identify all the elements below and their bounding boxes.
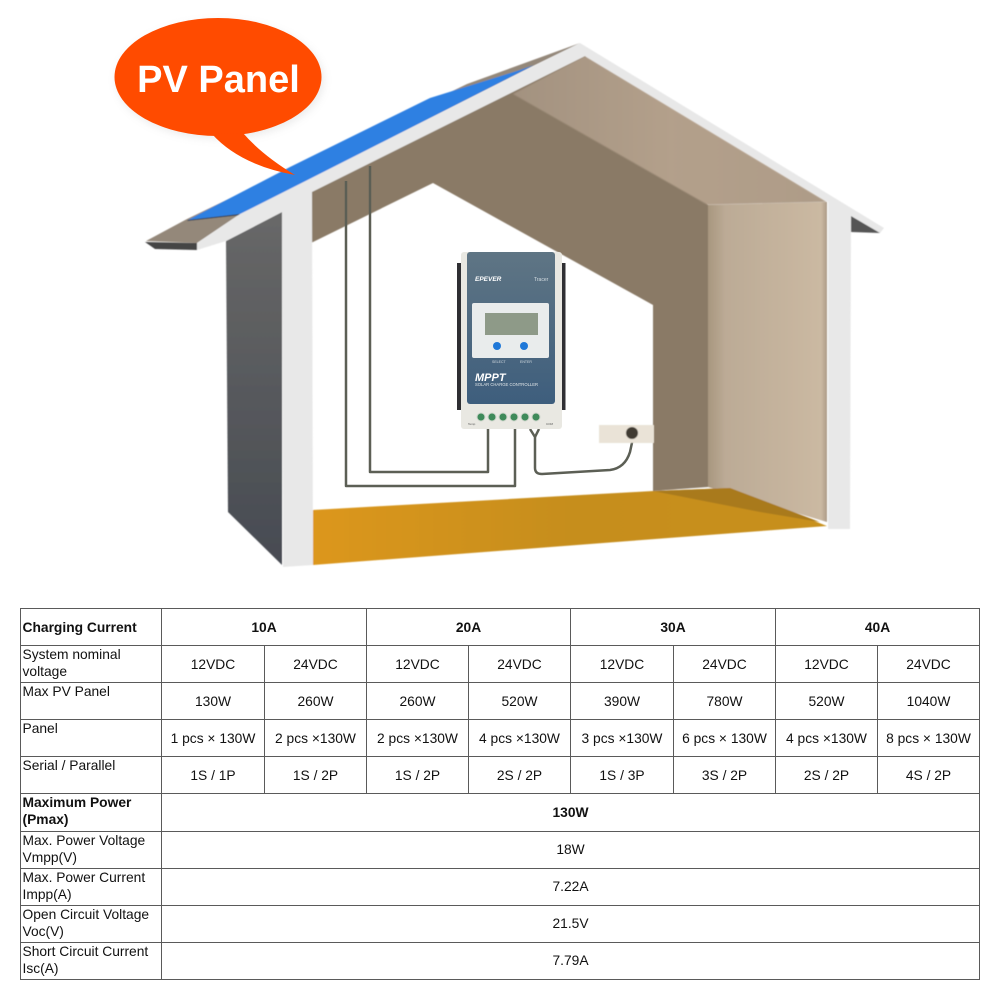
terminal labels: COM — [546, 422, 554, 426]
row: max PV panel: 520W — [501, 694, 538, 709]
row: max PV panel: 520W — [808, 694, 845, 709]
row: panel: 2 pcs ×130W — [275, 731, 356, 746]
LCD screen — [485, 313, 538, 335]
row: max PV panel: 260W — [399, 694, 436, 709]
MPPT label: MPPT — [475, 372, 507, 384]
row: max PV panel: 260W — [297, 694, 334, 709]
row: system nominal voltage — [22, 647, 951, 679]
callout bubble: PV Panel: PV Panel — [137, 59, 300, 101]
ceiling — [513, 56, 827, 205]
row: max power current: Max. Power Current — [22, 870, 145, 885]
row: serial / parallel: 2S / 2P — [497, 768, 542, 783]
row: system nominal voltage: 12VDC — [600, 657, 644, 672]
row: max PV panel: 1040W — [907, 694, 950, 709]
row: panel: 4 pcs ×130W — [479, 731, 560, 746]
row: system nominal voltage: 12VDC — [395, 657, 440, 672]
row: serial / parallel: 1S / 1P — [190, 768, 236, 783]
row: panel — [22, 721, 971, 746]
right wall — [708, 202, 827, 522]
house illustration — [114, 18, 884, 567]
row: short circuit current: 7.79A — [552, 953, 589, 968]
row: short circuit current: Short Circuit Current — [22, 944, 148, 959]
row: max PV panel: 780W — [706, 694, 743, 709]
model name: Tracer — [534, 277, 549, 283]
row: charging current — [22, 620, 971, 976]
panel edge — [187, 214, 241, 221]
row: serial / parallel: Serial / Parallel — [22, 758, 115, 773]
row: short circuit current: Isc(A) — [22, 961, 59, 976]
row: system nominal voltage: System nominal — [22, 647, 121, 662]
row: charging current: Charging Current — [22, 620, 137, 635]
row: max power current: Impp(A) — [22, 887, 72, 902]
terminal labels — [468, 422, 554, 426]
mounting brackets — [457, 263, 462, 410]
buttons — [493, 342, 528, 350]
row: charging current: 20A — [456, 620, 481, 635]
terminals — [477, 413, 540, 421]
row: open circuit voltage: 21.5V — [552, 916, 589, 931]
brown roof shingles — [146, 43, 580, 243]
blue solar panel on roof — [188, 65, 534, 220]
product description: SOLAR CHARGE CONTROLLER — [475, 382, 538, 387]
row: system nominal voltage: 12VDC — [191, 657, 235, 672]
row: open circuit voltage: Voc(V) — [22, 924, 64, 939]
row: max power current — [22, 870, 589, 902]
floor — [313, 488, 827, 565]
row: serial / parallel: 1S / 3P — [599, 768, 645, 783]
row: panel: 4 pcs ×130W — [786, 731, 867, 746]
row: panel: 2 pcs ×130W — [377, 731, 458, 746]
row: max PV panel: Max PV Panel — [22, 684, 110, 699]
row: max power voltage: Max. Power Voltage — [22, 833, 145, 848]
row: max PV panel — [22, 684, 950, 709]
row: max power voltage: Vmpp(V) — [22, 850, 77, 865]
callout bubble: PV Panel — [114, 18, 324, 175]
left eave underside — [145, 242, 197, 250]
row: serial / parallel: 1S / 2P — [293, 768, 338, 783]
row: max PV panel: 390W — [604, 694, 640, 709]
row: maximum power: Maximum Power — [22, 795, 131, 810]
house structure — [145, 43, 884, 567]
row: system nominal voltage: 24VDC — [497, 657, 542, 672]
row: max power voltage — [22, 833, 585, 865]
blue faceplate — [467, 252, 555, 404]
display frame — [472, 303, 549, 358]
right eave underside — [851, 216, 880, 233]
wall socket — [599, 425, 654, 443]
row: panel: 8 pcs × 130W — [886, 731, 971, 746]
wiring — [346, 166, 633, 486]
row: serial / parallel: 4S / 2P — [906, 768, 951, 783]
row: maximum power: (Pmax) — [22, 812, 69, 827]
row: maximum power: 130W — [552, 805, 589, 820]
back wall with doorway opening — [311, 56, 708, 491]
row: max power voltage: 18W — [556, 842, 585, 857]
floor shadow — [653, 488, 820, 522]
button labels — [492, 360, 532, 364]
row: open circuit voltage: Open Circuit Voltage — [22, 907, 149, 922]
MPPT solar charge controller — [457, 252, 566, 429]
row: serial / parallel: 3S / 2P — [702, 768, 747, 783]
button labels: SELECT — [492, 360, 506, 364]
row: short circuit current — [22, 944, 589, 976]
row: charging current: 10A — [251, 620, 277, 635]
left outer wall — [226, 212, 282, 565]
brand logo: EPEVER — [475, 276, 502, 283]
row: system nominal voltage: voltage — [22, 664, 67, 679]
row: charging current: 30A — [660, 620, 686, 635]
row: max power current: 7.22A — [552, 879, 589, 894]
row: system nominal voltage: 24VDC — [702, 657, 747, 672]
row: open circuit voltage — [22, 907, 589, 939]
row: max PV panel: 130W — [195, 694, 231, 709]
row: system nominal voltage: 24VDC — [293, 657, 338, 672]
button labels: ENTER — [520, 360, 532, 364]
terminal labels: Temp — [468, 422, 476, 426]
row: serial / parallel: 2S / 2P — [804, 768, 849, 783]
white roof and columns — [197, 43, 884, 567]
row: panel: 3 pcs ×130W — [582, 731, 662, 746]
row: serial / parallel — [22, 758, 951, 783]
row: maximum power — [22, 795, 589, 827]
row: system nominal voltage: 24VDC — [906, 657, 951, 672]
specification table — [20, 608, 980, 980]
controller body — [461, 252, 562, 429]
row: panel: Panel — [22, 721, 58, 736]
row: system nominal voltage: 12VDC — [804, 657, 849, 672]
row: panel: 1 pcs × 130W — [171, 731, 255, 746]
row: charging current: 40A — [865, 620, 890, 635]
row: panel: 6 pcs × 130W — [682, 731, 767, 746]
row: serial / parallel: 1S / 2P — [395, 768, 440, 783]
